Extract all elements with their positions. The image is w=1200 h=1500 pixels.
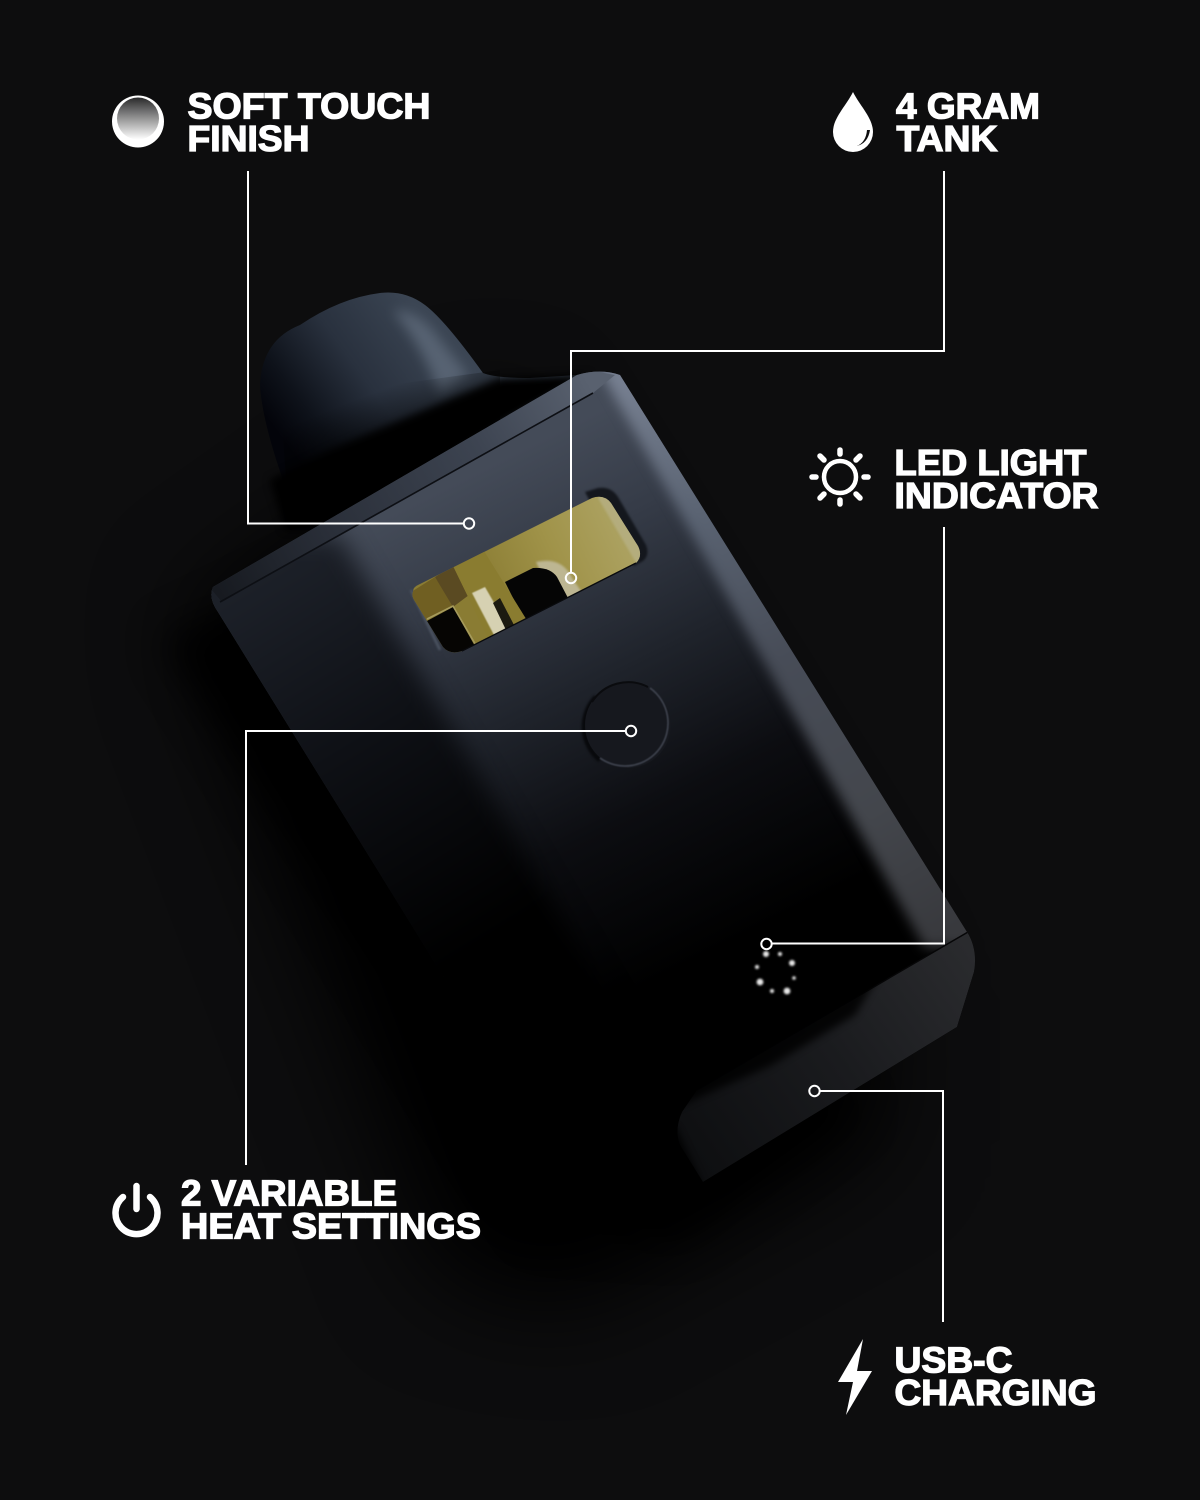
tank window (410, 486, 648, 652)
device with drop shadow (174, 292, 975, 1288)
black tank area right (505, 568, 568, 622)
callout line: 4 gram tank (566, 171, 944, 583)
heading: LED light indicator (894, 442, 1098, 516)
heading: 2 variable heat settings: 2 VARIABLE (181, 1172, 397, 1214)
feature: 4 gram tank (833, 86, 1040, 159)
heading: LED light indicator: LED LIGHT (894, 442, 1087, 483)
thin lines (427, 606, 477, 647)
left side face (212, 532, 560, 996)
callout line: USB-C charging (809, 1086, 943, 1322)
brown band (435, 567, 468, 606)
heading: 4 gram tank (896, 86, 1040, 159)
heading: soft touch finish: SOFT TOUCH (188, 86, 430, 126)
icon: sun (812, 450, 868, 504)
heading: 2 variable heat settings (181, 1172, 481, 1246)
feature: USB-C charging (838, 1339, 1096, 1415)
left gold band (412, 577, 452, 619)
heading: soft touch finish (188, 86, 430, 159)
power button (584, 682, 671, 768)
heading: 4 gram tank: 4 GRAM (896, 86, 1040, 126)
bottom seam (864, 932, 968, 993)
pale right rim (598, 496, 640, 563)
pale glow near tank (536, 560, 582, 597)
LED ring (755, 951, 796, 994)
highlight on post (472, 587, 508, 637)
heading: USB-C charging: CHARGING (894, 1372, 1096, 1413)
feature: LED light indicator (812, 442, 1098, 516)
feature: heat settings (116, 1172, 481, 1246)
callout line: heat settings (246, 726, 636, 1165)
heading: USB-C charging: USB-C (894, 1340, 1012, 1380)
callout line: LED light indicator (761, 527, 944, 949)
heading: LED light indicator: INDICATOR (894, 475, 1098, 516)
drop shadow (165, 400, 880, 1310)
heading: 4 gram tank: TANK (896, 118, 998, 159)
mouthpiece (260, 292, 590, 530)
top seam (220, 393, 593, 602)
black tank area left (427, 607, 474, 652)
icon: lightning bolt (838, 1339, 872, 1415)
top rim (205, 368, 615, 602)
bottom cap (677, 932, 976, 1182)
callout line: soft touch finish (248, 171, 474, 529)
central post (454, 552, 526, 622)
icon: water drop (833, 92, 873, 152)
feature: soft touch finish (112, 86, 430, 159)
heading: soft touch finish: FINISH (188, 118, 310, 159)
icon: power (116, 1186, 158, 1234)
heading: 2 variable heat settings: HEAT SETTINGS (181, 1206, 481, 1246)
right edge face (594, 360, 1000, 948)
body (211, 372, 975, 1182)
icon: gradient circle (112, 96, 164, 148)
heading: USB-C charging (894, 1340, 1096, 1413)
slot on post (493, 598, 514, 630)
